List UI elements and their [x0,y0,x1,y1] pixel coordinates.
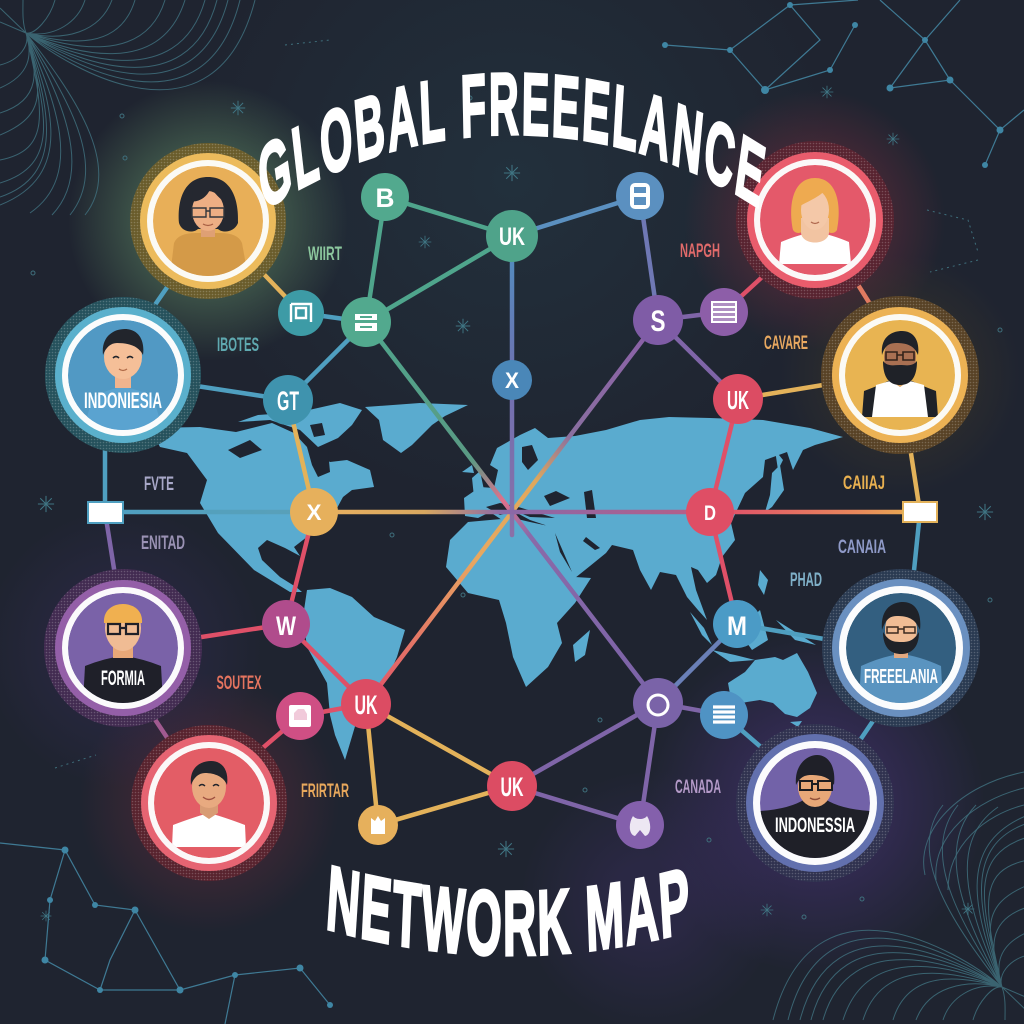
node: orange icon [358,805,398,845]
label: FVTE: FVTE [144,474,174,495]
node: UK top: UK [499,223,525,251]
node: UK bottom [487,761,537,811]
map: UK and islands [462,450,784,512]
link: hub spokes [122,236,920,704]
node: purple list icon [700,288,748,336]
map: Africa [446,518,591,687]
node: S: S [650,305,666,338]
label: IBOTES: IBOTES [217,335,259,356]
label: CANADA bottom: CANADA [675,777,721,798]
avatar label: INDONIESIA [84,388,162,413]
link: blue and teal connectors [105,286,920,755]
avatar: woman with glasses, orange [130,143,286,299]
map: Indonesia [690,570,816,662]
link: purple connectors [105,196,738,825]
label: CANAIA: CANAIA [838,537,886,558]
node: X center [492,360,532,400]
node: GT: GT [277,386,299,416]
title: Global Freelance: GLOBAL FREEELANCE [259,72,766,208]
map: North America [150,423,374,592]
link: green connectors [366,197,512,322]
node: UK right [713,374,763,424]
node: circle icon [633,678,683,728]
rectangle node left [88,502,123,523]
avatar: blonde woman, red [736,141,894,299]
node: W: W [276,611,296,641]
avatar: Freeelania man, blue [822,569,980,727]
node: X left [290,488,338,536]
avatar: man in white shirt, red [131,725,287,881]
label: SOUTEX: SOUTEX [216,673,262,694]
network links [105,196,920,825]
world map [150,403,843,760]
node: pink icon [276,692,324,740]
node: purple icon [616,801,664,849]
node: B [361,173,409,221]
avatar label: FORMIA [101,667,145,690]
avatar: Indonessia man, indigo [736,724,894,882]
node: X center: X [505,368,519,393]
labels [141,241,886,802]
label: WIIRT: WIIRT [308,244,342,265]
node: M: M [727,611,747,641]
map: South America [303,588,405,760]
title: Network Map: NETWORK MAP [327,864,688,957]
node: UK lower left [341,679,391,729]
label: CAIIAJ: CAIIAJ [843,473,885,494]
node: blue list icon [700,691,748,739]
link: orange connectors [258,268,920,825]
node: UK lower left: UK [354,690,378,720]
node: teal icon [278,290,324,336]
node: green icon [341,297,391,347]
link: red connectors [195,268,875,752]
node: UK top [486,210,538,262]
map: Greenland [365,403,468,453]
avatar label: INDONESSIA [775,814,855,837]
rectangle node right [903,502,937,522]
node: D: D [704,502,716,525]
node: D [686,488,734,536]
node: B: B [376,183,394,213]
map: Arctic islands [238,403,362,447]
label: ENITAD: ENITAD [141,533,185,554]
label: CAVARE: CAVARE [764,333,808,354]
node: blue app icon [616,172,664,220]
avatar: bearded man, orange [821,296,979,454]
node: W [262,600,310,648]
node: S [633,295,683,345]
avatar label: FREEELANIA [864,666,938,688]
avatar: ForMia man, purple [44,569,202,727]
node: UK right: UK [727,385,749,415]
node: UK bottom: UK [500,772,524,802]
map: inland seas [228,423,600,577]
avatar: Indonesia man, blue [45,297,201,453]
label: PHAD: PHAD [790,570,822,591]
label: NAPGH: NAPGH [680,241,720,262]
map: Madagascar [573,630,590,662]
label: FRIRTAR: FRIRTAR [301,781,349,802]
node: M [713,600,761,648]
map: Eurasia [464,417,843,620]
node: X left: X [306,500,322,525]
node: GT [263,375,313,425]
map: Australia [728,653,817,717]
